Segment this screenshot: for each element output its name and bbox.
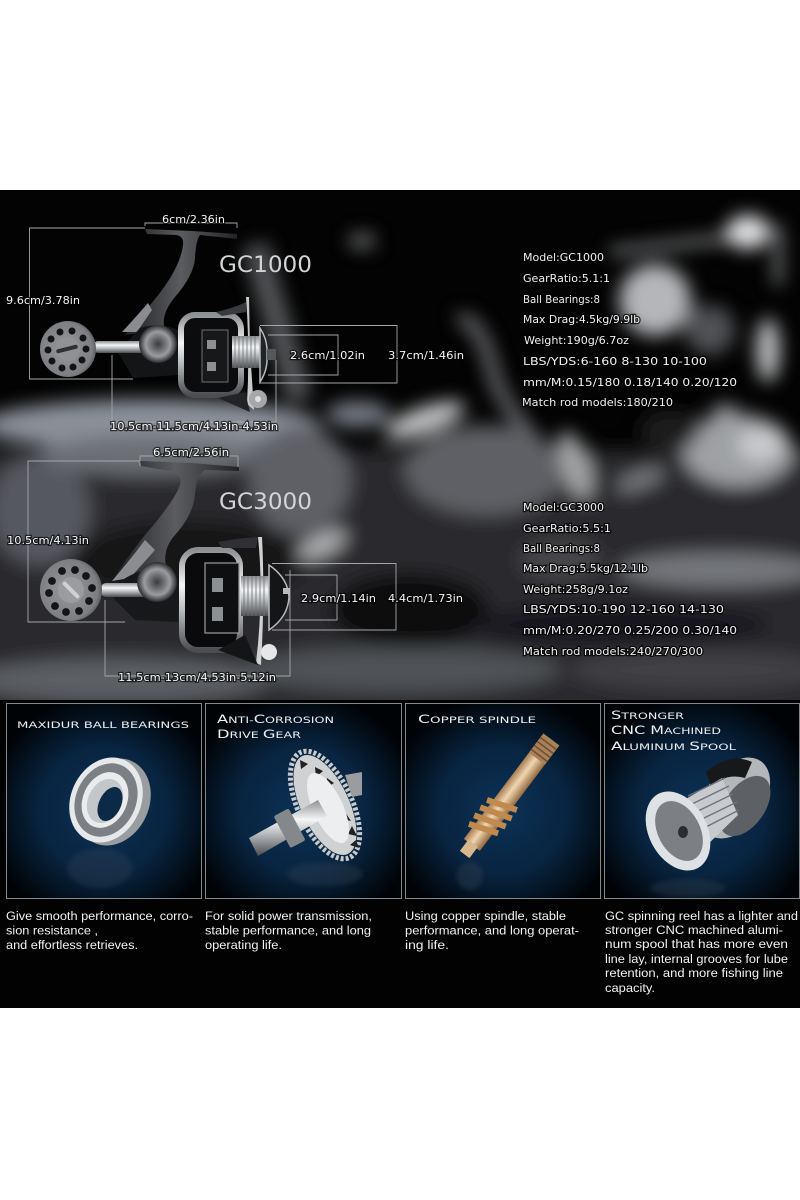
text: aluminum spool description: capacity.	[605, 981, 655, 995]
heading: aluminum spool	[611, 708, 736, 753]
spec list GC3000: LBS/YDS:10-190 12-160 14-130	[523, 604, 724, 616]
heading: aluminum spool: S TRONGER	[611, 708, 684, 722]
handle arm	[101, 583, 173, 597]
bail arm	[256, 537, 263, 665]
handle knob	[40, 321, 96, 377]
dimension brackets GC3000	[28, 456, 396, 676]
panel: drive gear card	[205, 704, 402, 952]
bail arm	[246, 297, 254, 410]
dimension labels GC3000: 10.5cm/4.13in	[7, 534, 89, 547]
icon: ball bearing	[56, 745, 165, 888]
heading: aluminum spool: CNC M ACHINED	[611, 723, 721, 737]
centre arc	[449, 304, 544, 444]
icon: copper spindle	[452, 730, 564, 890]
dimension labels GC1000: 2.6cm/1.02in	[290, 349, 365, 362]
text: ball bearings description: and effortless retrieves.	[6, 938, 138, 952]
text: copper spindle description	[405, 909, 579, 952]
dimension labels GC3000: 6.5cm/2.56in	[153, 446, 229, 459]
panel: ball bearings card	[6, 704, 202, 952]
model title GC1000: GC1000	[219, 253, 312, 278]
heading: aluminum spool: A LUMINUM S POOL	[611, 739, 736, 753]
dimension labels GC1000: 6cm/2.36in	[162, 213, 225, 226]
text: aluminum spool description: retention, and more fishing line	[605, 966, 783, 980]
dimension labels GC1000: 10.5cm-11.5cm/4.13in-4.53in	[110, 420, 278, 433]
text: drive gear description: stable performance, and long	[205, 924, 371, 938]
text: ball bearings description: sion resistance ,	[6, 924, 98, 938]
text: drive gear description: operating life.	[205, 938, 282, 952]
heading: ball bearings: MAXIDUR BALL BEARINGS	[17, 721, 189, 731]
reel foot and stem	[110, 461, 239, 622]
spec list GC3000: Ball Bearings:8	[523, 543, 600, 555]
dimension labels GC1000: 9.6cm/3.78in	[6, 294, 80, 307]
line spool	[232, 328, 276, 382]
heading: drive gear: D RIVE G EAR	[217, 727, 301, 741]
spec list GC3000: mm/M:0.20/270 0.25/200 0.30/140	[523, 625, 737, 637]
text: copper spindle description: Using copper spindle, stable	[405, 909, 566, 923]
text: aluminum spool description	[605, 909, 798, 995]
reel GC3000	[7, 446, 463, 684]
panel: aluminum spool card	[604, 704, 800, 995]
line spool	[241, 565, 290, 630]
heading: drive gear: A NTI- C ORROSION	[217, 712, 334, 726]
dimension labels GC3000: 2.9cm/1.14in	[301, 592, 376, 605]
right reel silhouette	[610, 238, 730, 252]
bail knob	[218, 390, 267, 412]
upper-left streak	[255, 245, 300, 400]
spec list GC1000: LBS/YDS:6-160 8-130 10-100	[523, 356, 707, 368]
spec list GC1000	[522, 252, 737, 409]
panel: dark background	[0, 190, 800, 1008]
handle knob	[40, 559, 102, 621]
panel: lower feature section	[0, 700, 800, 1008]
reel foot and stem	[118, 229, 237, 378]
text: drive gear description: For solid power transmission,	[205, 909, 372, 923]
spec list GC1000: GearRatio:5.1:1	[523, 273, 610, 285]
spec list GC1000: Weight:190g/6.7oz	[524, 335, 630, 347]
bail knob	[218, 635, 277, 665]
icon: drive gear	[249, 741, 374, 886]
text: aluminum spool description: num spool that has more even	[605, 937, 788, 951]
heading: drive gear	[217, 712, 334, 741]
spec list GC1000: Model:GC1000	[523, 252, 604, 264]
icon: aluminum spool	[633, 745, 785, 897]
dimension labels GC3000: 11.5cm-13cm/4.53in-5.12in	[118, 671, 276, 684]
text: copper spindle description: performance, and long operat-	[405, 924, 579, 938]
text: drive gear description	[205, 909, 372, 952]
dimension brackets GC1000	[30, 223, 397, 422]
rotor cage	[182, 550, 240, 650]
blurred reel photo backdrop	[0, 215, 800, 740]
spec list GC1000: Match rod models:180/210	[522, 397, 673, 409]
model title GC3000: GC3000	[219, 490, 312, 515]
spec list GC3000: Match rod models:240/270/300	[523, 646, 703, 658]
text: ball bearings description	[6, 909, 193, 952]
text: aluminum spool description: line lay, internal grooves for lube	[605, 952, 788, 966]
dimension labels GC1000	[6, 213, 464, 433]
spec list GC1000: Ball Bearings:8	[523, 294, 600, 306]
spec list GC3000: Weight:258g/9.1oz	[523, 584, 629, 596]
spec list GC1000: mm/M:0.15/180 0.18/140 0.20/120	[523, 377, 737, 389]
panel: copper spindle card	[405, 704, 600, 952]
text: aluminum spool description: stronger CNC machined alumi-	[605, 923, 783, 937]
dimension labels GC3000: 4.4cm/1.73in	[388, 592, 463, 605]
dimension labels GC3000	[7, 446, 463, 684]
dimension labels GC1000: 3.7cm/1.46in	[388, 349, 464, 362]
spec list GC3000	[523, 502, 737, 658]
text: aluminum spool description: GC spinning reel has a lighter and	[605, 909, 798, 923]
spec list GC3000: Max Drag:5.5kg/12.1lb	[523, 563, 648, 575]
spec list GC3000: GearRatio:5.5:1	[523, 523, 611, 535]
handle arm	[94, 341, 169, 353]
text: copper spindle description: ing life.	[405, 938, 449, 952]
crank hub	[137, 562, 177, 602]
crank hub	[139, 325, 177, 363]
rotor cage	[181, 315, 241, 395]
reel GC1000	[6, 213, 464, 433]
spec list GC1000: Max Drag:4.5kg/9.9lb	[523, 314, 640, 326]
text: ball bearings description: Give smooth performance, corro-	[6, 909, 193, 923]
spec list GC3000: Model:GC3000	[523, 502, 604, 514]
heading: copper spindle: C OPPER SPINDLE	[418, 712, 536, 726]
